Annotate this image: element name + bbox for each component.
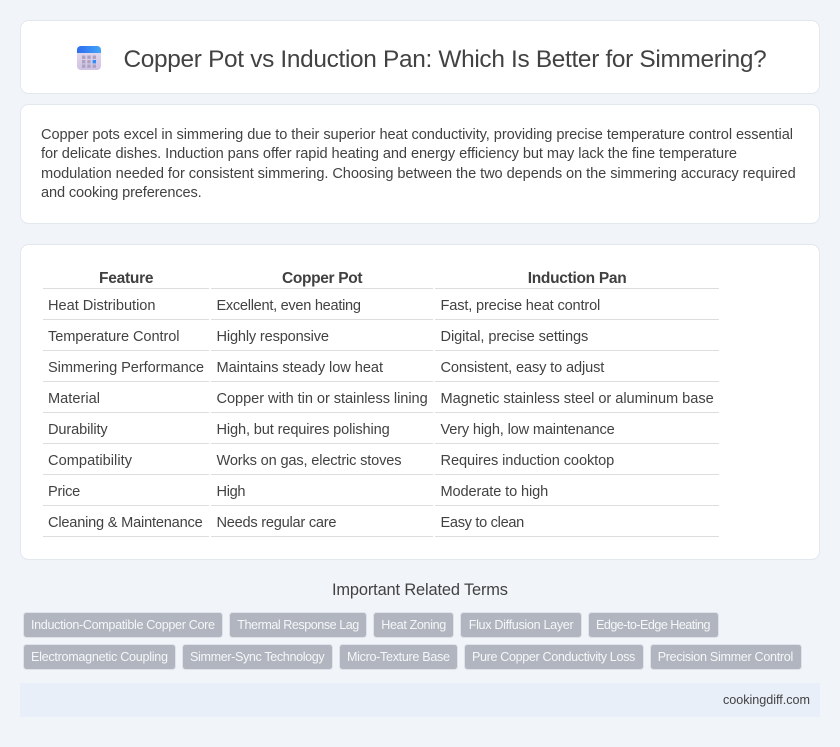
row: temperature control: Temperature Control <box>48 329 180 345</box>
table header row <box>43 270 719 289</box>
tag: simmer-sync technology: Simmer-Sync Technology <box>190 650 325 664</box>
row: material <box>43 391 719 413</box>
tag: heat zoning: Heat Zoning <box>381 618 446 632</box>
row: durability: High, but requires polishing <box>216 422 390 438</box>
row: durability <box>43 422 719 444</box>
footer source text: cookingdiff.com <box>723 693 810 707</box>
row: simmering performance: Maintains steady low heat <box>216 360 383 376</box>
row: heat distribution <box>43 298 719 320</box>
tag: micro-texture base: Micro-Texture Base <box>347 650 450 664</box>
panel: title card <box>20 20 820 94</box>
summary paragraph: for delicate dishes. Induction pans offer rapid heating and energy efficiency but may lack the fine temperature <box>41 146 737 162</box>
row: cleaning and maintenance <box>43 515 719 537</box>
tag: simmer-sync technology <box>182 644 332 670</box>
title: Copper Pot vs Induction Pan: Which Is Better for Simmering? <box>124 46 767 73</box>
row: heat distribution: Heat Distribution <box>48 298 156 314</box>
row: price: Price <box>48 484 80 500</box>
tag: precision simmer control <box>650 644 802 670</box>
icon: calendar <box>77 46 101 70</box>
summary paragraph: and cooking preferences. <box>41 185 202 201</box>
row: cleaning and maintenance: Easy to clean <box>440 515 524 531</box>
summary paragraph <box>41 127 796 201</box>
tag: precision simmer control: Precision Simmer Control <box>658 650 793 664</box>
tag: thermal response lag <box>230 612 366 638</box>
tag: heat zoning <box>374 612 454 638</box>
tag: thermal response lag: Thermal Response Lag <box>237 618 359 632</box>
tag list <box>24 612 802 670</box>
tag: electromagnetic coupling <box>24 644 176 670</box>
row: compatibility: Compatibility <box>48 453 133 469</box>
panel: summary <box>20 104 820 224</box>
table header row: Induction Pan <box>528 270 627 287</box>
row: compatibility: Works on gas, electric stoves <box>216 453 402 469</box>
summary paragraph: Copper pots excel in simmering due to their superior heat conductivity, providing precise temperature control essential <box>41 127 793 143</box>
row: material: Copper with tin or stainless lining <box>216 391 428 407</box>
tag: flux diffusion layer <box>460 612 582 638</box>
row: price: Moderate to high <box>440 484 548 500</box>
row: price <box>43 484 719 506</box>
row: material: Material <box>48 391 100 407</box>
row: durability: Durability <box>48 422 108 438</box>
heading: important related terms: Important Related Terms <box>332 581 508 599</box>
tag: edge-to-edge heating <box>588 612 718 638</box>
table header row: Copper Pot <box>282 270 362 287</box>
row: temperature control: Digital, precise settings <box>440 329 588 345</box>
row: compatibility: Requires induction cooktop <box>440 453 614 469</box>
tag: edge-to-edge heating: Edge-to-Edge Heating <box>596 618 710 632</box>
row: heat distribution: Excellent, even heating <box>216 298 361 314</box>
row: durability: Very high, low maintenance <box>440 422 615 438</box>
tag: pure copper conductivity loss <box>464 644 644 670</box>
row: material: Magnetic stainless steel or aluminum base <box>440 391 714 407</box>
row: temperature control <box>43 329 719 351</box>
row: simmering performance <box>43 360 719 382</box>
tag: induction-compatible copper core: Induction-Compatible Copper Core <box>31 618 215 632</box>
row: temperature control: Highly responsive <box>216 329 329 345</box>
tag: micro-texture base <box>340 644 458 670</box>
row: cleaning and maintenance: Needs regular care <box>216 515 336 531</box>
row: simmering performance: Consistent, easy to adjust <box>440 360 604 376</box>
tag: flux diffusion layer: Flux Diffusion Layer <box>469 618 574 632</box>
row: heat distribution: Fast, precise heat control <box>440 298 600 314</box>
tag: pure copper conductivity loss: Pure Copper Conductivity Loss <box>472 650 635 664</box>
row: simmering performance: Simmering Performance <box>48 360 204 376</box>
tag: electromagnetic coupling: Electromagnetic Coupling <box>31 650 168 664</box>
summary paragraph: modulation needed for consistent simmering. Choosing between the two depends on the simmering accuracy required <box>41 166 796 182</box>
row: cleaning and maintenance: Cleaning & Maintenance <box>48 515 203 531</box>
panel: comparison table <box>20 244 820 560</box>
footer bar <box>20 683 820 717</box>
row: compatibility <box>43 453 719 475</box>
row: price: High <box>216 484 246 500</box>
table header row: Feature <box>99 270 154 287</box>
tag: induction-compatible copper core <box>24 612 222 638</box>
